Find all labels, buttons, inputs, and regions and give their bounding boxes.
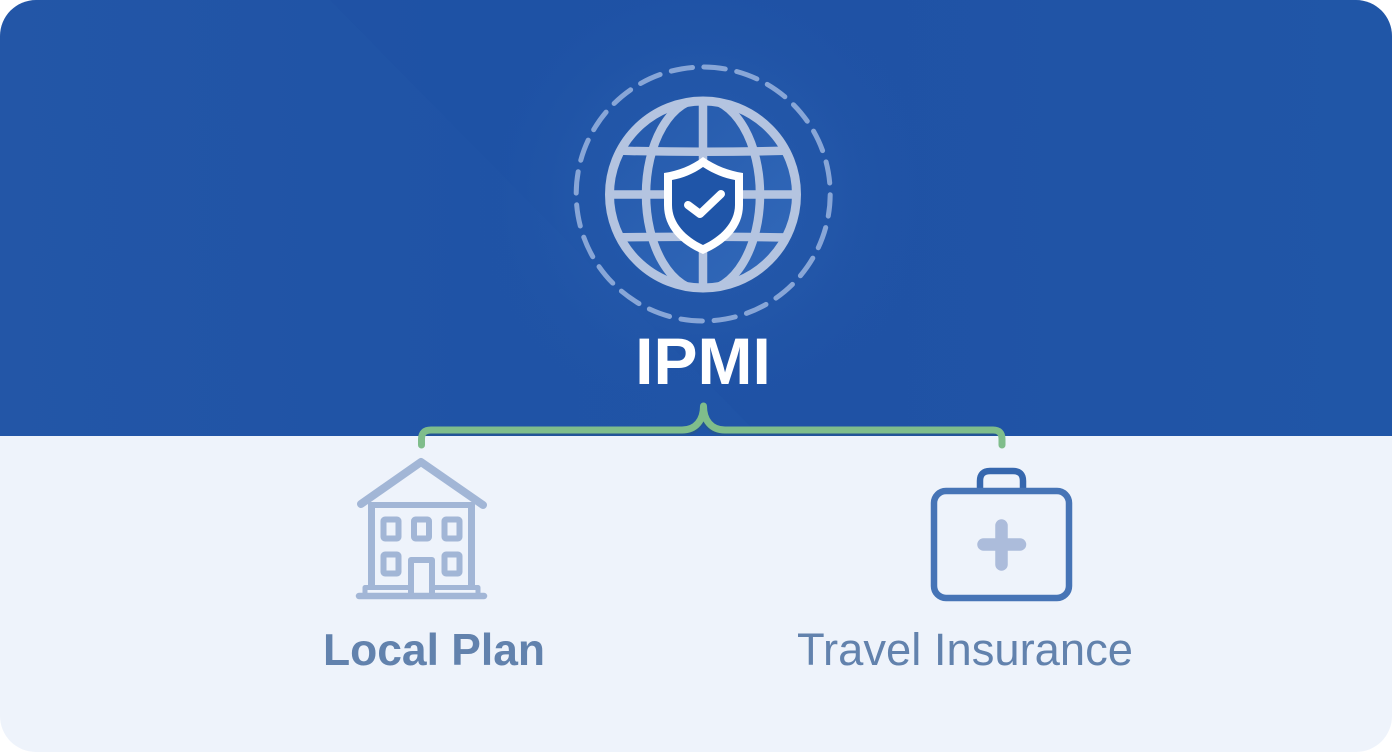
label: Travel Insurance: Travel Insurance bbox=[797, 624, 1133, 675]
panel: bottom light background bbox=[0, 436, 1392, 752]
connector: green bracket linking IPMI to both options bbox=[422, 406, 1002, 445]
label: Local Plan: Local Plan bbox=[323, 626, 545, 675]
icon: globe bbox=[605, 98, 807, 291]
icon: shield with check mark bbox=[664, 157, 743, 254]
icon: house for local plan bbox=[359, 462, 484, 596]
panel: top blue background bbox=[0, 0, 1392, 436]
icon: medical case for travel insurance bbox=[934, 471, 1069, 598]
title: IPMI: IPMI bbox=[635, 324, 771, 398]
icon: dashed ring around globe bbox=[576, 66, 831, 322]
